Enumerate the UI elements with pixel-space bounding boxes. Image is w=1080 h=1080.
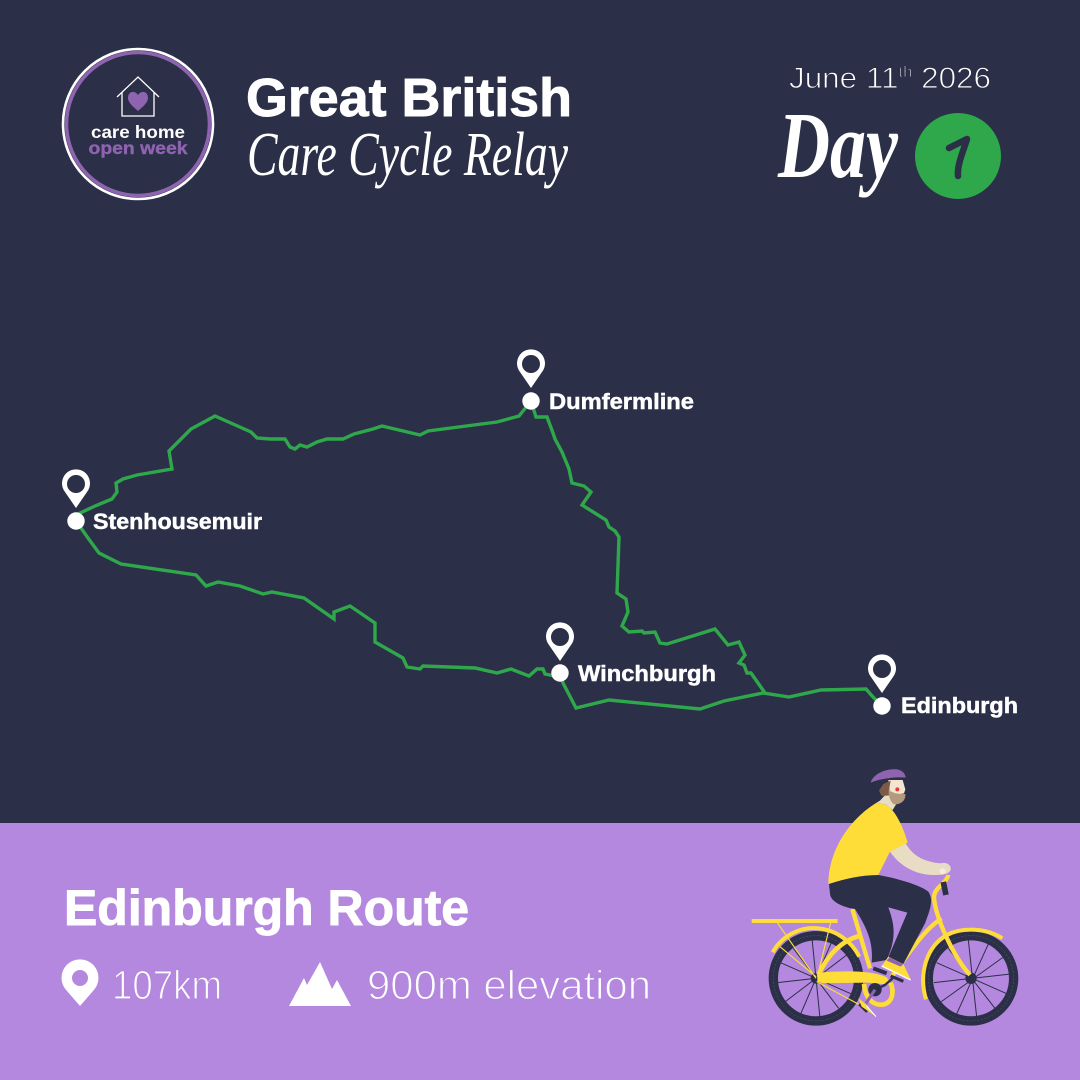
stop: Winchburgh: Winchburgh <box>578 661 716 686</box>
hand highlight <box>940 868 946 874</box>
helmet <box>871 769 906 783</box>
date: th <box>898 64 912 81</box>
rear wheel <box>773 936 859 1021</box>
title: Great British: Great British <box>246 68 572 128</box>
day number badge <box>915 113 1001 199</box>
stop: Dumfermline: Dumfermline <box>549 389 694 414</box>
stop: Winchburgh <box>546 622 716 686</box>
stop: Stenhousemuir <box>62 469 262 534</box>
stop: Dumfermline <box>517 349 694 414</box>
front wheel <box>928 936 1014 1021</box>
handlebar grip <box>943 882 946 895</box>
rider head <box>871 769 906 810</box>
illustration: cyclist on yellow bicycle <box>752 769 1014 1021</box>
elevation value: 900m elevation <box>367 962 651 1008</box>
stop: Stenhousemuir: Stenhousemuir <box>93 509 262 534</box>
chainring and pedals <box>858 976 903 1017</box>
date: June 11 <box>789 62 894 95</box>
rider trousers <box>829 875 931 964</box>
rider shirt <box>828 803 908 884</box>
distance value: 107km <box>112 962 222 1008</box>
icon: mountain <box>289 962 351 1006</box>
bicycle frame <box>752 875 1002 1005</box>
rider shoe <box>873 957 911 980</box>
title: Care Cycle Relay: Care Cycle Relay <box>247 121 568 189</box>
day label: Day <box>777 94 898 198</box>
icon: heart <box>128 92 148 111</box>
stop: Edinburgh <box>868 654 1018 718</box>
bicycle chainstay <box>817 971 892 985</box>
logo text: open week: open week <box>88 138 188 158</box>
panel: route summary band <box>0 823 1080 1080</box>
rider arm <box>890 843 951 875</box>
route heading: Edinburgh Route <box>64 880 469 936</box>
stop: Edinburgh: Edinburgh <box>901 693 1018 718</box>
route map line <box>76 401 882 709</box>
icon: distance pin <box>62 959 98 1006</box>
icon: house outline <box>117 77 159 116</box>
logo: care home open week <box>63 49 213 199</box>
date: 2026 <box>912 62 991 95</box>
day number badge: 1 <box>958 169 959 171</box>
logo text: care home: care home <box>91 122 185 142</box>
